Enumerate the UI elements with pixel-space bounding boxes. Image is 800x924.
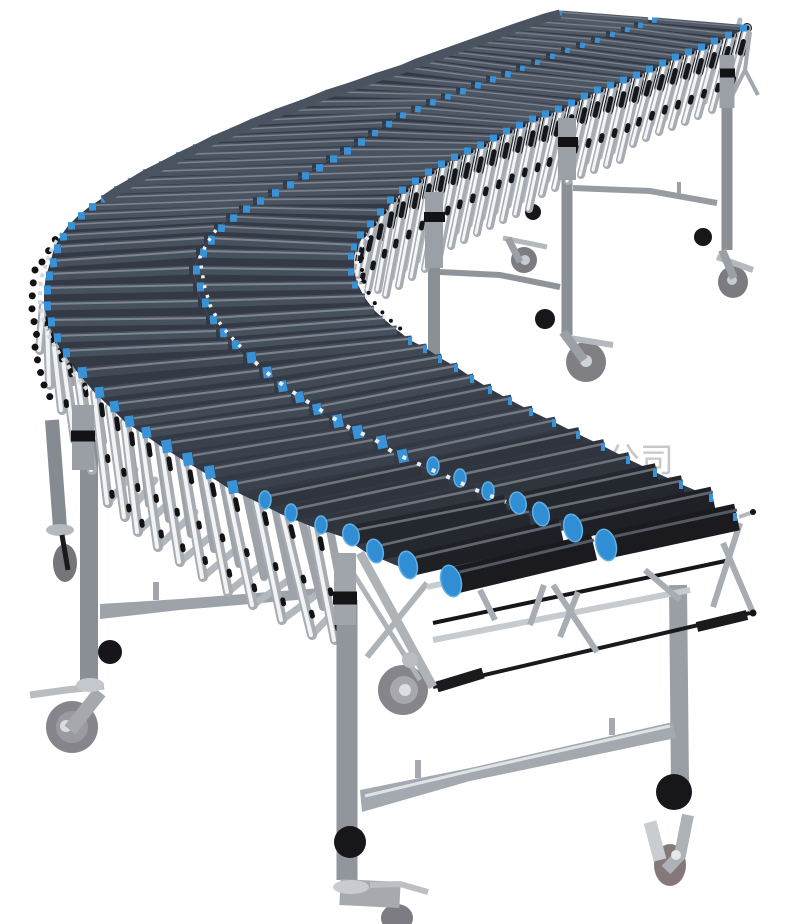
front scissor bars — [345, 553, 433, 687]
main crossbar — [360, 722, 676, 812]
left crossbar bolt — [153, 582, 159, 600]
lower black rod — [433, 613, 750, 687]
rollers — [44, 12, 747, 583]
rear left leg and caster — [46, 420, 77, 582]
crossbar highlight — [365, 726, 670, 796]
inner edge black dots — [362, 258, 402, 330]
rollers near middle — [257, 432, 630, 527]
front wheel — [378, 665, 428, 715]
far crossbar right — [573, 188, 717, 203]
silver rod — [433, 590, 690, 640]
far leg C — [428, 265, 440, 362]
far leg A — [722, 105, 732, 250]
upper black rod — [433, 560, 730, 623]
outer lane far edge, no visible blue caps — [104, 14, 560, 200]
far leg collars — [424, 55, 735, 268]
far caster 1 — [503, 238, 547, 273]
front left leg — [336, 600, 358, 880]
rounded blue roller caps — [259, 457, 620, 599]
rollers middle — [162, 387, 556, 488]
middle scissor bars — [480, 585, 597, 652]
far caster 2 — [717, 250, 753, 298]
front right knob — [656, 774, 692, 810]
inner roller caps far — [348, 28, 747, 285]
rollers far section — [428, 12, 747, 80]
second front roller — [400, 492, 713, 567]
far support frame — [434, 105, 753, 382]
front left knob — [334, 826, 366, 858]
right front leg — [678, 585, 680, 785]
outer scissor chain — [39, 278, 346, 640]
outer edge silver shaft ends — [40, 233, 90, 393]
bolt on far crossbar — [677, 182, 681, 194]
rollers bend — [44, 238, 397, 353]
left knob — [98, 640, 122, 664]
rollers upper section — [211, 61, 614, 139]
left crossbar — [100, 588, 320, 619]
rollers near — [343, 468, 683, 553]
front right caster — [650, 815, 688, 886]
front roller — [443, 510, 737, 583]
far knob 2 — [694, 228, 712, 246]
inner roller caps near — [408, 341, 737, 517]
sleeve left — [437, 673, 483, 687]
front axle ends — [427, 509, 756, 616]
outer edge dots — [32, 232, 60, 403]
centre chain white joints lower — [255, 362, 506, 502]
far knob 1 — [525, 204, 541, 220]
watermark text: 公司 — [606, 442, 674, 480]
far caster 3 — [563, 332, 613, 382]
roller bed backing: outer lane — [44, 13, 652, 567]
sleeve right — [697, 615, 747, 627]
inner edge white joints — [357, 237, 415, 341]
end scissor frame far right — [730, 32, 758, 100]
roller bed backing: inner lane — [193, 20, 747, 530]
left caster — [30, 678, 104, 753]
far knob 3 — [535, 309, 555, 329]
left leg collar — [71, 405, 95, 470]
rollers lower bend — [78, 338, 474, 433]
right scissor bars — [645, 523, 753, 613]
inner scissor chain — [351, 20, 747, 295]
crossbar bolts — [418, 718, 612, 778]
front leg collar — [333, 553, 357, 625]
far leg B — [562, 180, 572, 335]
front frame under rollers — [345, 523, 753, 785]
left leg — [80, 440, 98, 685]
front left caster — [333, 880, 428, 924]
front joint plate — [402, 652, 418, 668]
far crossbar left — [440, 272, 560, 287]
rollers upper bend — [60, 140, 484, 237]
centre chain white joints bend — [200, 230, 241, 347]
